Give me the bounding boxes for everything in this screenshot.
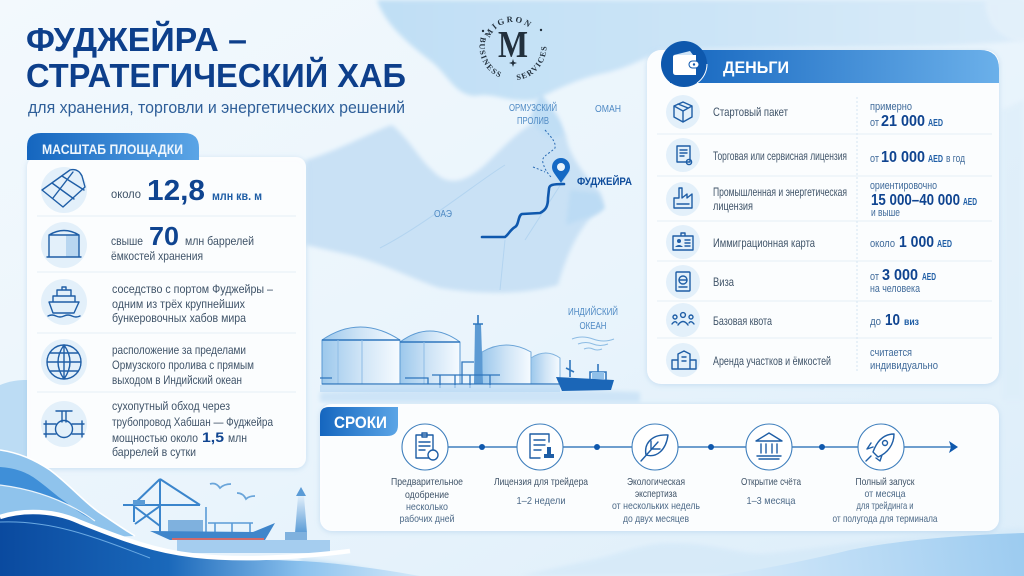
row: industrial and energy license: лицензия: [713, 199, 753, 213]
row: storage: свыше: [111, 234, 143, 248]
row: starter package: [666, 95, 943, 130]
row: industrial and energy license: ориентировочно: [870, 180, 937, 192]
step: environmental review: [612, 424, 700, 525]
map pin: [552, 158, 570, 183]
row: pipeline: [41, 399, 273, 459]
row: immigration card: 1 000: [899, 234, 934, 251]
timeline arrow: [448, 441, 958, 453]
row: pipeline: 1,5: [202, 429, 224, 445]
row: pipeline: млн: [228, 431, 247, 445]
row: plot and tank rental: считается: [870, 347, 912, 359]
row: area: около: [111, 187, 141, 201]
step: environmental review: Экологическая: [627, 476, 685, 488]
step: full launch: для трейдинга и: [856, 500, 914, 512]
logo: Migron Business Services: SERVICES: [516, 46, 546, 80]
map labels: ОКЕАН: [580, 320, 606, 332]
row: plot and tank rental: Аренда участков и ёмкостей: [713, 354, 831, 368]
row: immigration card: Иммиграционная карта: [713, 236, 815, 250]
map labels: ОМАН: [595, 103, 621, 115]
step: trader license: 1–2 недели: [516, 495, 566, 507]
map labels: ИНДИЙСКИЙ: [568, 305, 618, 318]
row: starter package: 21 000: [881, 113, 925, 130]
tab: site scale: [27, 133, 199, 160]
step: trader license: [494, 424, 588, 507]
logo: Migron Business Services: MIGRON: [484, 16, 532, 38]
decorative waves: [0, 450, 420, 576]
row: base quota: [666, 303, 919, 337]
illustration: tanker ship: [556, 360, 614, 391]
row: industrial and energy license: [666, 180, 977, 219]
row: location: выходом в Индийский океан: [112, 373, 242, 387]
pipeline route: [482, 184, 564, 237]
row: port: соседство с портом Фуджейры –: [112, 282, 273, 296]
step: environmental review: экспертиза: [635, 488, 677, 500]
row: trade or service license: [666, 138, 965, 172]
row: visa: Виза: [713, 275, 734, 289]
row: port: одним из трёх крупнейших: [112, 297, 245, 311]
title: ФУДЖЕЙРА –: [26, 20, 247, 58]
row: area: [41, 167, 262, 213]
icon: ocean waves: [572, 337, 614, 350]
map labels: ПРОЛИВ: [517, 115, 549, 127]
row: immigration card: AED: [937, 238, 952, 250]
row: immigration card: около: [870, 238, 895, 250]
logo: Migron Business Services: [479, 16, 546, 80]
row: trade or service license: от: [870, 153, 879, 165]
row: area: 12,8: [147, 175, 205, 207]
tab: timeline: СРОКИ: [334, 413, 387, 432]
row: storage: ёмкостей хранения: [111, 249, 203, 263]
row: visa: на человека: [870, 283, 921, 295]
step: preliminary approval: рабочих дней: [400, 513, 455, 525]
row: plot and tank rental: индивидуально: [870, 360, 938, 372]
row: immigration card: [666, 225, 952, 259]
row: pipeline: трубопровод Хабшан — Фуджейра: [112, 415, 273, 429]
title: [26, 20, 406, 94]
step: full launch: от полугода для терминала: [832, 513, 938, 525]
step: full launch: Полный запуск: [856, 476, 915, 488]
panel: money: [647, 41, 999, 384]
heading: money: ДЕНЬГИ: [723, 58, 789, 77]
row: industrial and energy license: AED: [963, 196, 977, 208]
row: storage: 70: [149, 221, 179, 251]
row: starter package: AED: [928, 117, 943, 129]
row: visa: от: [870, 271, 879, 283]
row: location: Ормузского пролива с прямым: [112, 358, 254, 372]
row: trade or service license: 10 000: [881, 149, 925, 166]
row: base quota: до: [870, 316, 881, 328]
row: base quota: Базовая квота: [713, 314, 772, 328]
step: preliminary approval: Предварительное: [391, 476, 463, 488]
step: preliminary approval: несколько: [406, 501, 448, 513]
map labels: ОАЭ: [434, 208, 452, 220]
row: industrial and energy license: Промышленная и энергетическая: [713, 185, 847, 199]
header bar: [670, 50, 999, 83]
step: preliminary approval: одобрение: [405, 489, 449, 501]
row: visa: 3 000: [882, 267, 918, 284]
row: base quota: 10: [885, 312, 900, 329]
map labels: [434, 101, 621, 332]
row: industrial and energy license: и выше: [871, 207, 900, 219]
row: industrial and energy license: 15 000–40 000: [871, 192, 960, 209]
step: full launch: от месяца: [864, 488, 906, 500]
step: environmental review: до двух месяцев: [623, 513, 689, 525]
row: starter package: примерно: [870, 101, 912, 113]
row: pipeline: мощностью около: [112, 431, 198, 445]
row: starter package: от: [870, 117, 879, 129]
row: area: млн кв. м: [212, 191, 262, 203]
row: trade or service license: в год: [946, 153, 965, 165]
row: location: [41, 339, 254, 387]
label: Fujairah: ФУДЖЕЙРА: [577, 175, 632, 188]
row: visa: [666, 265, 936, 299]
step: account opening: Открытие счёта: [741, 476, 801, 488]
row: trade or service license: Торговая или сервисная лицензия: [713, 149, 847, 163]
row: pipeline: баррелей в сутки: [112, 445, 196, 459]
step: account opening: [741, 424, 801, 507]
logo: Migron Business Services: M: [498, 24, 528, 66]
row: port: бункеровочных хабов мира: [112, 311, 246, 325]
map labels: ОРМУЗСКИЙ: [509, 101, 557, 114]
title: СТРАТЕГИЧЕСКИЙ ХАБ: [26, 56, 406, 94]
step: environmental review: от нескольких недель: [612, 500, 700, 512]
row: trade or service license: AED: [928, 153, 943, 165]
step: full launch: [832, 424, 938, 525]
row: visa: AED: [922, 271, 936, 283]
row: storage: [41, 221, 254, 268]
row: location: расположение за пределами: [112, 343, 246, 357]
logo: Migron Business Services: BUSINESS: [479, 37, 502, 77]
row: port: [41, 279, 273, 325]
strait dashed route: [533, 130, 555, 178]
illustration: storage tanks terminal: [320, 315, 560, 392]
tab: site scale: МАСШТАБ ПЛОЩАДКИ: [42, 141, 183, 157]
step: account opening: 1–3 месяца: [746, 495, 796, 507]
step: preliminary approval: [391, 424, 463, 525]
illustration: port with crane and ship: [123, 479, 330, 553]
subtitle: для хранения, торговли и энергетических решений: [28, 99, 405, 117]
row: pipeline: сухопутный обход через: [112, 399, 230, 413]
step: trader license: Лицензия для трейдера: [494, 476, 588, 488]
row: base quota: виз: [904, 316, 919, 328]
row: plot and tank rental: [666, 343, 938, 377]
tab: timeline: [320, 407, 398, 436]
icon: wallet: [661, 41, 707, 87]
row: starter package: Стартовый пакет: [713, 105, 788, 119]
panel: site scale: [27, 133, 306, 468]
panel: timeline: [320, 404, 999, 531]
row: storage: млн баррелей: [185, 234, 254, 248]
